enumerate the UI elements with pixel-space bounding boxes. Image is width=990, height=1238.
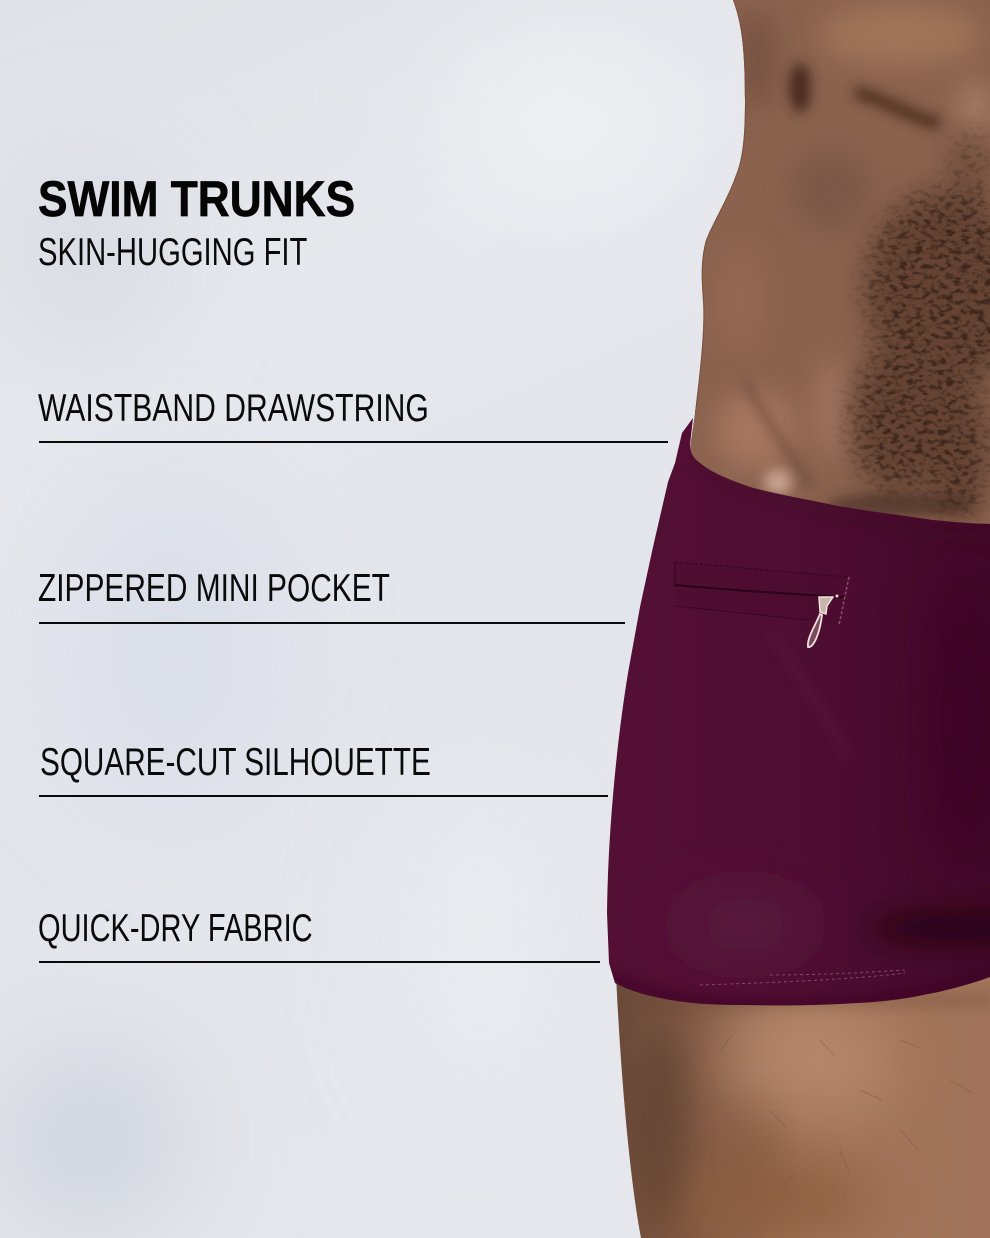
torso skin bbox=[690, 0, 990, 560]
leg skin bbox=[610, 965, 990, 1238]
label: square-cut silhouette: SQUARE-CUT SILHOUETTE bbox=[40, 741, 431, 784]
leader line: silhouette bbox=[39, 795, 608, 797]
zippered pocket bbox=[675, 562, 849, 625]
leader line: pocket bbox=[39, 622, 625, 624]
label: waistband drawstring: WAISTBAND DRAWSTRING bbox=[38, 387, 429, 430]
leader line: fabric bbox=[39, 961, 600, 963]
title: SWIM TRUNKS bbox=[38, 171, 355, 227]
hem stitching bbox=[700, 970, 905, 985]
leader line: waistband bbox=[39, 441, 668, 443]
trunks body bbox=[600, 410, 990, 1010]
subtitle: SKIN-HUGGING FIT bbox=[38, 231, 307, 274]
icon: zipper pull bbox=[808, 594, 838, 647]
label: quick-dry fabric: QUICK-DRY FABRIC bbox=[38, 907, 313, 950]
label: zippered mini pocket: ZIPPERED MINI POCKET bbox=[38, 567, 390, 610]
